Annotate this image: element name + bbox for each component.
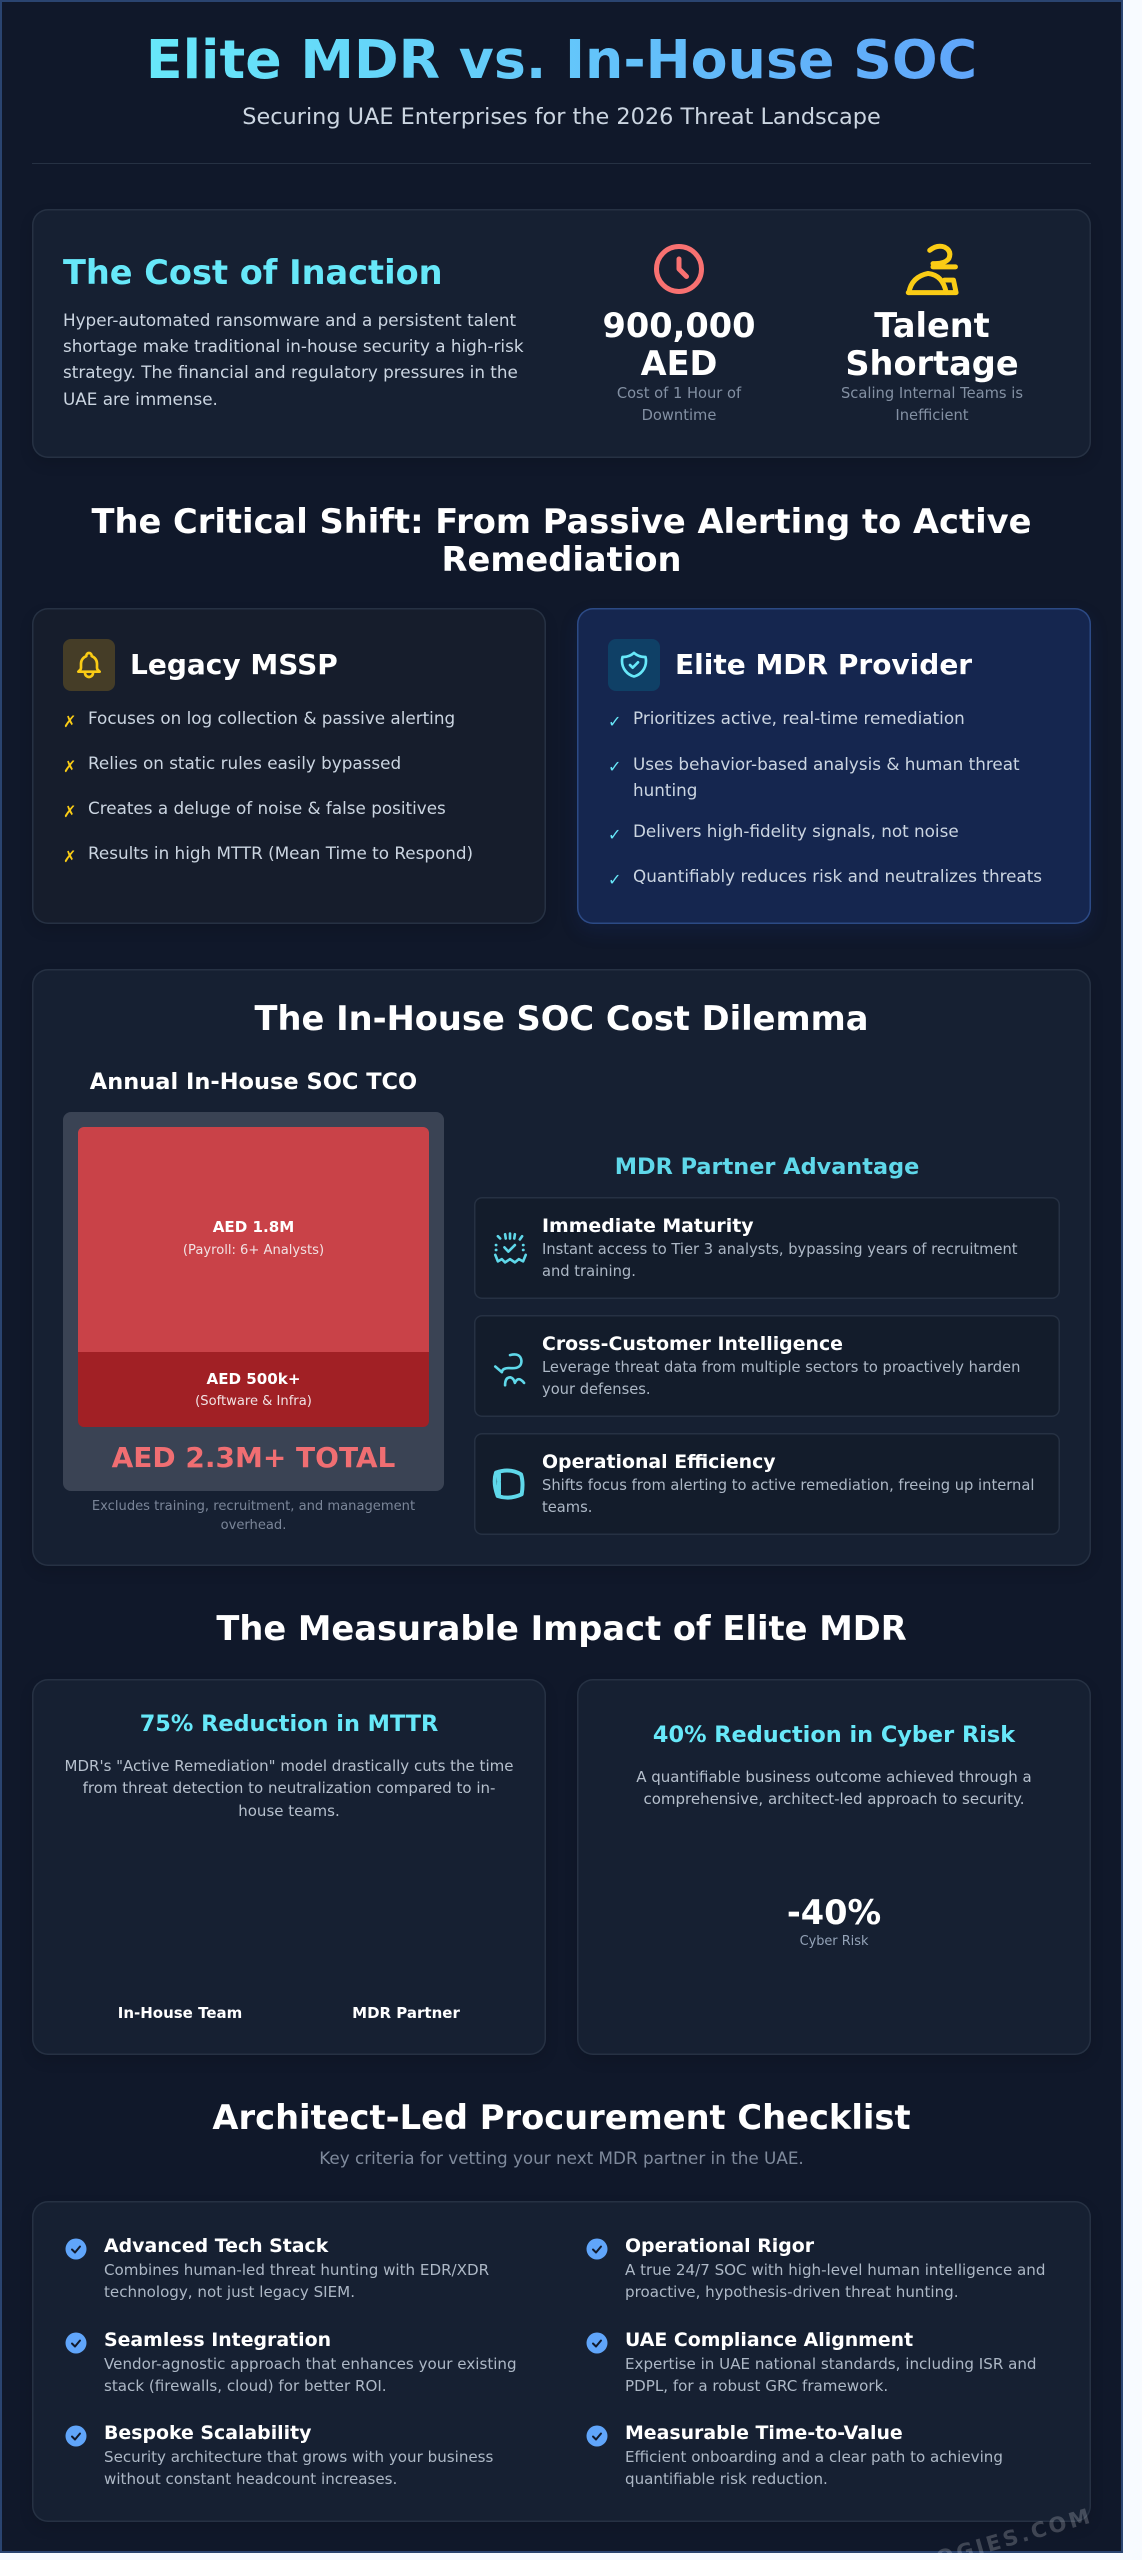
item title: Operational Rigor xyxy=(625,2235,814,2257)
item text xyxy=(104,2448,493,2488)
text block: inaction summary: strategy. The financial and regulatory pressures in the xyxy=(63,362,518,382)
item text: quantifiable risk reduction. xyxy=(625,2470,828,2488)
icon: squiggle network xyxy=(494,1353,526,1386)
footnote: overhead. xyxy=(221,1518,286,1533)
item text: proactive, hypothesis-driven threat hunting. xyxy=(625,2283,959,2301)
list: mdr strengths: Prioritizes active, real-time remediation xyxy=(633,708,965,728)
checklist item: advanced tech stack xyxy=(66,2235,489,2301)
stat: downtime cost xyxy=(603,244,755,424)
card text: teams. xyxy=(542,1499,592,1516)
list: legacy weaknesses xyxy=(63,708,473,866)
panel: checklist xyxy=(32,2201,1091,2522)
card: immediate maturity xyxy=(474,1197,1060,1299)
card text xyxy=(542,1359,1020,1398)
heading: procurement checklist: Architect-Led Procurement Checklist xyxy=(212,2098,911,2137)
item title: UAE Compliance Alignment xyxy=(625,2329,913,2351)
bar label: software caption: (Software & Infra) xyxy=(195,1394,312,1409)
card text: and training. xyxy=(542,1263,636,1280)
heading: critical shift xyxy=(92,502,1031,579)
footnote: Excludes training, recruitment, and management xyxy=(92,1499,415,1514)
checklist item: operational rigor xyxy=(586,2235,1045,2301)
card title: Operational Efficiency xyxy=(542,1451,776,1473)
list: legacy weaknesses: ✗ xyxy=(63,847,76,866)
item title: Measurable Time-to-Value xyxy=(625,2422,903,2444)
bar label: payroll value: AED 1.8M xyxy=(213,1218,294,1236)
icon: users xyxy=(906,244,959,296)
text block: mttr explanation: MDR's "Active Remediation" model drastically cuts the time xyxy=(65,1757,513,1775)
item text: without constant headcount increases. xyxy=(104,2470,397,2488)
item text xyxy=(625,2448,1003,2488)
stat: talent shortage xyxy=(841,244,1023,424)
text block: mttr explanation: house teams. xyxy=(238,1802,340,1820)
item text xyxy=(625,2354,1036,2395)
card text: Shifts focus from alerting to active remediation, freeing up internal xyxy=(542,1477,1034,1494)
text block: risk explanation: comprehensive, architect-led approach to security. xyxy=(643,1790,1025,1808)
bar: payroll xyxy=(78,1127,429,1352)
chart total: AED 2.3M+ TOTAL xyxy=(112,1441,395,1474)
stat value: 900,000 AED: 900,000 xyxy=(603,306,755,345)
card text xyxy=(542,1241,1018,1280)
item text: Combines human-led threat hunting with EDR/XDR xyxy=(104,2260,489,2278)
list: legacy weaknesses: ✗ xyxy=(63,757,76,776)
chart label: mdr partner: MDR Partner xyxy=(352,2004,460,2022)
checklist item: uae compliance xyxy=(586,2329,1036,2395)
icon: check xyxy=(586,2332,608,2354)
text block: risk explanation xyxy=(636,1768,1032,1808)
item title: Bespoke Scalability xyxy=(104,2422,311,2444)
panel: elite mdr provider xyxy=(577,608,1091,924)
chart label: in-house team: In-House Team xyxy=(118,2004,242,2022)
item text: technology, not just legacy SIEM. xyxy=(104,2283,355,2301)
panel: cost of inaction xyxy=(32,209,1091,458)
list: mdr strengths: ✓ xyxy=(608,712,621,731)
icon: check xyxy=(66,2332,86,2354)
heading: mdr partner advantage: MDR Partner Advantage xyxy=(615,1154,919,1180)
heading: legacy mssp: Legacy MSSP xyxy=(130,648,338,681)
item text: Vendor-agnostic approach that enhances your existing xyxy=(104,2354,517,2372)
stat caption: scaling teams xyxy=(841,385,1023,424)
icon: bell xyxy=(63,639,115,691)
icon: check xyxy=(586,2426,608,2446)
card text: your defenses. xyxy=(542,1381,651,1398)
item text: stack (firewalls, cloud) for better ROI. xyxy=(104,2377,387,2395)
item text: Security architecture that grows with your business xyxy=(104,2448,493,2466)
icon: tablet xyxy=(492,1468,524,1500)
panel: mttr reduction xyxy=(32,1679,546,2055)
list: mdr strengths: Delivers high-fidelity signals, not noise xyxy=(633,821,959,841)
list: legacy weaknesses: Focuses on log collection & passive alerting xyxy=(88,708,455,728)
heading: elite mdr provider: Elite MDR Provider xyxy=(675,648,972,681)
icon: check xyxy=(66,2238,86,2260)
heading: cost dilemma: The In-House SOC Cost Dilemma xyxy=(255,999,868,1038)
chart: stacked tco xyxy=(63,1112,444,1491)
stat value: 900,000 AED xyxy=(603,306,755,383)
panel: soc cost dilemma xyxy=(32,969,1091,1566)
icon: check xyxy=(66,2426,86,2446)
text block: inaction summary: Hyper-automated ransomware and a persistent talent xyxy=(63,310,516,330)
card text xyxy=(542,1477,1034,1516)
card text: Instant access to Tier 3 analysts, bypassing years of recruitment xyxy=(542,1241,1018,1258)
list: mdr strengths: ✓ xyxy=(608,870,621,889)
card title: Immediate Maturity xyxy=(542,1215,754,1237)
icon: clock xyxy=(654,244,704,294)
item text: PDPL, for a robust GRC framework. xyxy=(625,2377,888,2395)
list: legacy weaknesses: ✗ xyxy=(63,802,76,821)
stat caption: scaling teams: Scaling Internal Teams is xyxy=(841,385,1023,402)
footnote xyxy=(92,1499,415,1533)
list: mdr strengths: hunting xyxy=(633,780,697,800)
panel: legacy mssp xyxy=(32,608,546,924)
icon: maturity badge xyxy=(494,1232,528,1264)
stat value: 900,000 AED: AED xyxy=(641,344,717,383)
stat value: talent shortage xyxy=(845,306,1019,383)
item title: Advanced Tech Stack xyxy=(104,2235,328,2257)
list: legacy weaknesses: Results in high MTTR (Mean Time to Respond) xyxy=(88,843,473,863)
text block: inaction summary: UAE are immense. xyxy=(63,389,218,409)
list: mdr strengths: Uses behavior-based analysis & human threat xyxy=(633,754,1020,774)
heading: 75% reduction: 75% Reduction in MTTR xyxy=(140,1711,438,1737)
icon: check xyxy=(586,2238,608,2260)
title: Elite MDR vs. In-House SOC xyxy=(146,28,977,91)
text block: mttr explanation: from threat detection to neutralization compared to in- xyxy=(83,1779,495,1797)
card title: Cross-Customer Intelligence xyxy=(542,1333,843,1355)
list: legacy weaknesses: Creates a deluge of noise & false positives xyxy=(88,798,446,818)
list: mdr strengths: Quantifiably reduces risk and neutralizes threats xyxy=(633,866,1042,886)
heading: annual tco: Annual In-House SOC TCO xyxy=(90,1069,417,1095)
chart value: -40%: -40% xyxy=(787,1893,881,1932)
subtitle: Securing UAE Enterprises for the 2026 Threat Landscape xyxy=(242,104,881,130)
card text: Leverage threat data from multiple sectors to proactively harden xyxy=(542,1359,1020,1376)
list: legacy weaknesses: ✗ xyxy=(63,712,76,731)
text block: mttr explanation xyxy=(65,1757,513,1820)
stat value: talent shortage: Shortage xyxy=(845,344,1019,383)
checklist item: bespoke scalability xyxy=(66,2422,493,2488)
bar label: software value: AED 500k+ xyxy=(207,1370,300,1388)
list: mdr strengths xyxy=(608,708,1042,889)
text block: inaction summary: shortage make traditional in-house security a high-risk xyxy=(63,336,524,356)
bar: software and infra xyxy=(78,1352,429,1427)
bar label: payroll caption: (Payroll: 6+ Analysts) xyxy=(183,1243,324,1258)
stat caption: downtime: Cost of 1 Hour of xyxy=(617,385,741,402)
checklist item: time to value xyxy=(586,2422,1003,2488)
text block: risk explanation: A quantifiable business outcome achieved through a xyxy=(636,1768,1032,1786)
list: mdr strengths: ✓ xyxy=(608,757,621,776)
list: mdr strengths: ✓ xyxy=(608,825,621,844)
card: operational efficiency xyxy=(474,1433,1060,1535)
heading: 40% reduction: 40% Reduction in Cyber Risk xyxy=(653,1722,1015,1748)
item text: Expertise in UAE national standards, including ISR and xyxy=(625,2354,1036,2372)
panel: cyber risk reduction xyxy=(577,1679,1091,2055)
card: cross-customer intelligence xyxy=(474,1315,1060,1417)
list: legacy weaknesses: Relies on static rules easily bypassed xyxy=(88,753,401,773)
text block: inaction summary xyxy=(63,310,524,409)
item text xyxy=(625,2260,1045,2301)
stat caption: downtime: Downtime xyxy=(642,407,716,424)
item text xyxy=(104,2260,489,2301)
icon: shield check xyxy=(608,639,660,691)
item text: A true 24/7 SOC with high-level human intelligence and xyxy=(625,2260,1045,2278)
item text xyxy=(104,2354,517,2395)
stat caption: scaling teams: Inefficient xyxy=(895,407,969,424)
heading: critical shift: Remediation xyxy=(442,540,681,579)
heading: measurable impact: The Measurable Impact of Elite MDR xyxy=(216,1609,907,1648)
stat value: talent shortage: Talent xyxy=(874,306,990,345)
stat caption: downtime xyxy=(617,385,742,424)
chart label: cyber risk: Cyber Risk xyxy=(800,1934,868,1949)
heading: the cost of inaction: The Cost of Inaction xyxy=(63,253,443,292)
heading: critical shift: The Critical Shift: From Passive Alerting to Active xyxy=(92,502,1031,541)
checklist item: seamless integration xyxy=(66,2329,517,2395)
subtitle: checklist: Key criteria for vetting your next MDR partner in the UAE. xyxy=(319,2148,804,2168)
item text: Efficient onboarding and a clear path to achieving xyxy=(625,2448,1003,2466)
item title: Seamless Integration xyxy=(104,2329,331,2351)
